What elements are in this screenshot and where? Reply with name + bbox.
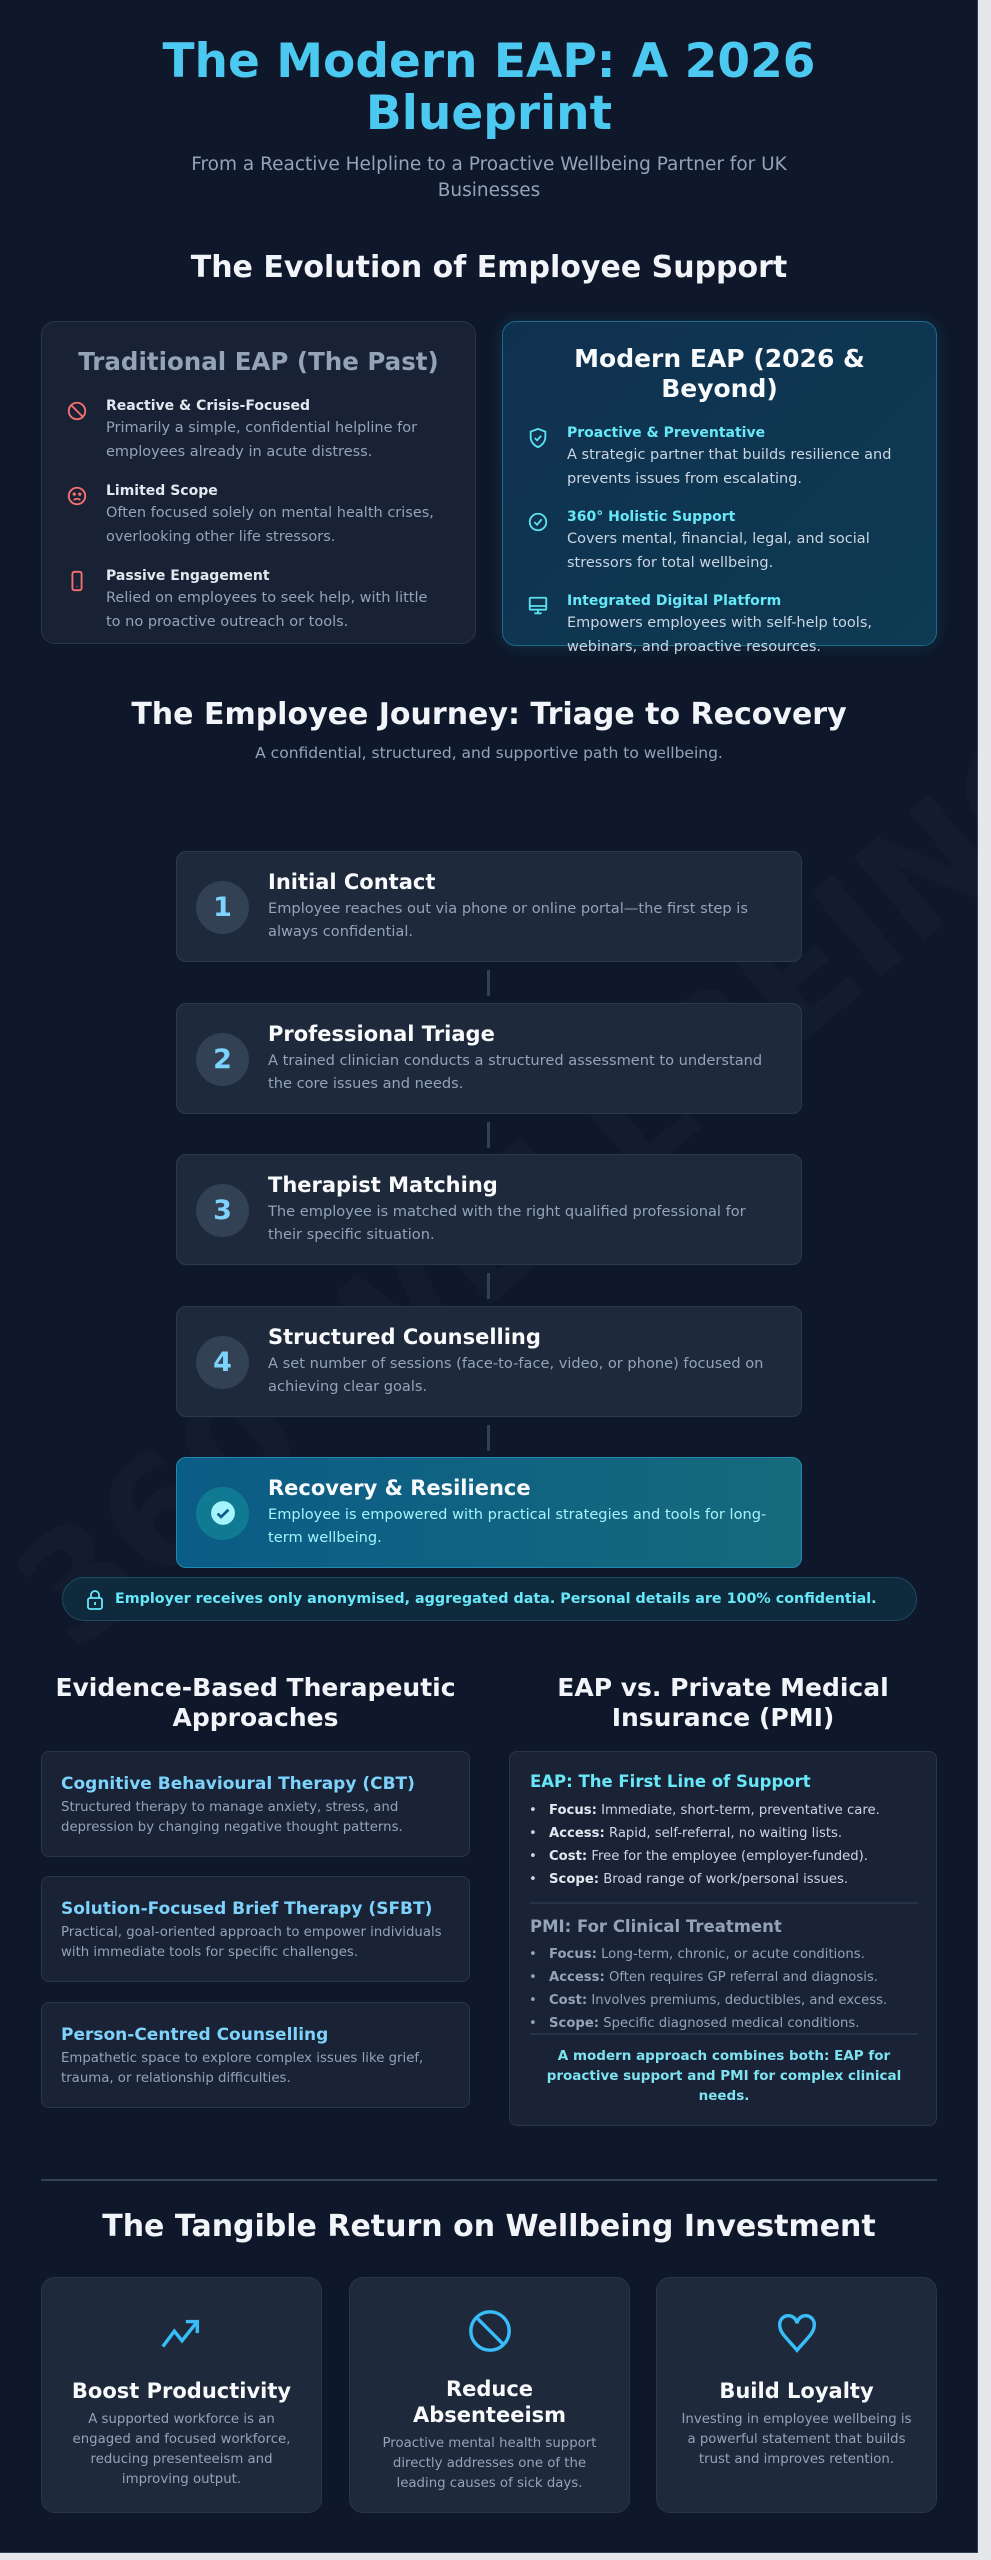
card: loyalty [656,2277,937,2513]
step 3: The employee is matched with the right qualified professional for their specific situation. [268,1203,746,1243]
heading: journey: The Employee Journey: Triage to Recovery [131,697,847,732]
icon: ban [68,402,86,420]
EAP heading: EAP: The First Line of Support [530,1772,811,1791]
item: reactive: Reactive & Crisis-Focused [106,398,310,414]
icon: monitor [528,596,548,614]
step 3 [176,1154,802,1265]
PMI list: Scope: Specific diagnosed medical conditions. [549,2016,859,2031]
heading: ROI: The Tangible Return on Wellbeing Investment [102,2209,876,2244]
item: proactive: Proactive & Preventative [567,425,765,441]
EAP list: Scope: Broad range of work/personal issues. [549,1872,848,1887]
icon: ban [469,2310,511,2352]
step 2: Professional Triage [268,1022,495,1046]
subtitle: From a Reactive Helpline to a Proactive Wellbeing Partner for UK Businesses [191,154,787,201]
icon: phone [72,570,82,592]
item: limited scope [68,483,434,545]
step 1 [176,851,802,962]
comparison summary [547,2048,901,2104]
item: holistic: Covers mental, financial, legal, and social stressors for total wellbeing. [567,531,870,571]
item: holistic: 360° Holistic Support [567,509,735,525]
card: absenteeism: Absenteeism [413,2403,566,2427]
icon: lock [87,1590,103,1610]
card: productivity: A supported workforce is an engaged and focused workforce, reducing presenteeism and improving output. [73,2412,290,2487]
step 4: 4 [213,1347,232,1378]
panel: modern EAP [502,321,937,646]
title: Blueprint [366,86,612,141]
step 4: Structured Counselling [268,1325,541,1349]
item: proactive: A strategic partner that builds resilience and prevents issues from escalating. [567,447,891,487]
step 1: 1 [213,892,232,923]
item: passive: to no proactive outreach or tools. [106,614,348,630]
PMI heading: PMI: For Clinical Treatment [530,1917,782,1936]
item: passive [72,568,427,630]
card: CBT: Structured therapy to manage anxiety, stress, and depression by changing negative thought patterns. [61,1800,403,1835]
panel: traditional EAP [41,321,476,644]
item: reactive [68,398,418,460]
card: loyalty: Investing in employee wellbeing is [681,2412,912,2427]
step 5: Employee is empowered with practical strategies and tools for long-term wellbeing. [268,1506,766,1546]
icon: shield [530,428,546,448]
card: CBT: Cognitive Behavioural Therapy (CBT) [61,1774,415,1794]
PMI list [531,1947,887,2031]
item: digital [528,593,872,655]
step 4: A set number of sessions (face-to-face, video, or phone) focused on achieving clear goals. [268,1355,763,1395]
step 2: A trained clinician conducts a structured assessment to understand the core issues and needs. [268,1052,762,1092]
panel: EAP vs PMI comparison [509,1751,937,2126]
step 3: 3 [213,1195,232,1226]
card: loyalty: a powerful statement that builds [687,2432,906,2447]
panel heading: modern: Beyond) [661,374,778,403]
item: digital: Integrated Digital Platform [567,593,781,609]
item: passive: Relied on employees to seek help, with little [106,590,427,606]
EAP list [531,1803,880,1887]
PMI list: Focus: Long-term, chronic, or acute conditions. [549,1947,865,1962]
panel heading: traditional: Traditional EAP (The Past) [78,347,439,376]
step 5 [176,1457,802,1568]
card: CBT [41,1751,470,1857]
card: productivity [41,2277,322,2513]
card: SFBT: Practical, goal-oriented approach to empower individuals with immediate tools for specific challenges. [61,1925,442,1960]
item: passive: Passive Engagement [106,568,270,584]
heading: EAP vs PMI: EAP vs. Private Medical Insurance (PMI) [557,1673,889,1732]
step 2 [176,1003,802,1114]
title: The Modern EAP: A 2026 [162,34,815,89]
step 1: Employee reaches out via phone or online portal—the first step is always confidential. [268,900,748,940]
PMI list: Cost: Involves premiums, deductibles, and excess. [549,1993,887,2008]
item: limited scope: Often focused solely on mental health crises, overlooking other life stressors. [106,505,434,545]
journey subtitle: A confidential, structured, and supportive path to wellbeing. [255,744,723,762]
callout: confidentiality: Employer receives only anonymised, aggregated data. Personal details are 100% confidential. [115,1591,877,1607]
icon: trend up [162,2320,200,2348]
step 5: Recovery & Resilience [268,1476,531,1500]
card: SFBT: Solution-Focused Brief Therapy (SFBT) [61,1899,432,1919]
card: loyalty: Build Loyalty [719,2379,874,2403]
comparison summary: A modern approach combines both: EAP for [558,2048,890,2064]
step 2: 2 [213,1044,232,1075]
item: holistic [528,509,870,571]
item: digital: Empowers employees with self-help tools, webinars, and proactive resources. [567,615,872,655]
icon: sad face [68,486,86,506]
EAP list: Access: Rapid, self-referral, no waiting lists. [549,1826,842,1841]
panel heading: modern [574,344,865,403]
icon: check [211,1501,235,1525]
PMI list: Access: Often requires GP referral and diagnosis. [549,1970,878,1985]
item: limited scope: Limited Scope [106,483,218,499]
step 3: Therapist Matching [268,1173,498,1197]
heading: evolution: The Evolution of Employee Support [191,250,787,285]
card: SFBT [41,1876,470,1982]
card: absenteeism [349,2277,630,2513]
item: reactive: Primarily a simple, confidential helpline for employees already in acute distress. [106,420,417,460]
card: person-centred: Empathetic space to explore complex issues like grief, trauma, or relationship difficulties. [61,2051,423,2086]
card: absenteeism: Reduce [446,2377,533,2401]
callout: confidentiality [62,1577,917,1621]
icon: check circle [528,512,548,532]
heading: therapeutic approaches: Evidence-Based Therapeutic Approaches [55,1673,456,1732]
panel heading: modern: Modern EAP (2026 & [574,344,865,373]
EAP list: Cost: Free for the employee (employer-funded). [549,1849,868,1864]
step 4 [176,1306,802,1417]
card: productivity: Boost Productivity [72,2379,291,2403]
EAP list: Focus: Immediate, short-term, preventative care. [549,1803,880,1818]
comparison summary: proactive support and PMI for complex clinical [547,2068,901,2084]
card: loyalty: trust and improves retention. [699,2452,894,2467]
step 1: Initial Contact [268,870,435,894]
card: person-centred: Person-Centred Counselling [61,2025,328,2045]
comparison summary: needs. [699,2088,749,2104]
item: proactive [530,425,891,487]
title [162,34,815,141]
icon: heart [778,2314,816,2353]
card: person-centred [41,2002,470,2108]
card: absenteeism: Proactive mental health support directly addresses one of the leading causes of sick days. [383,2436,596,2491]
